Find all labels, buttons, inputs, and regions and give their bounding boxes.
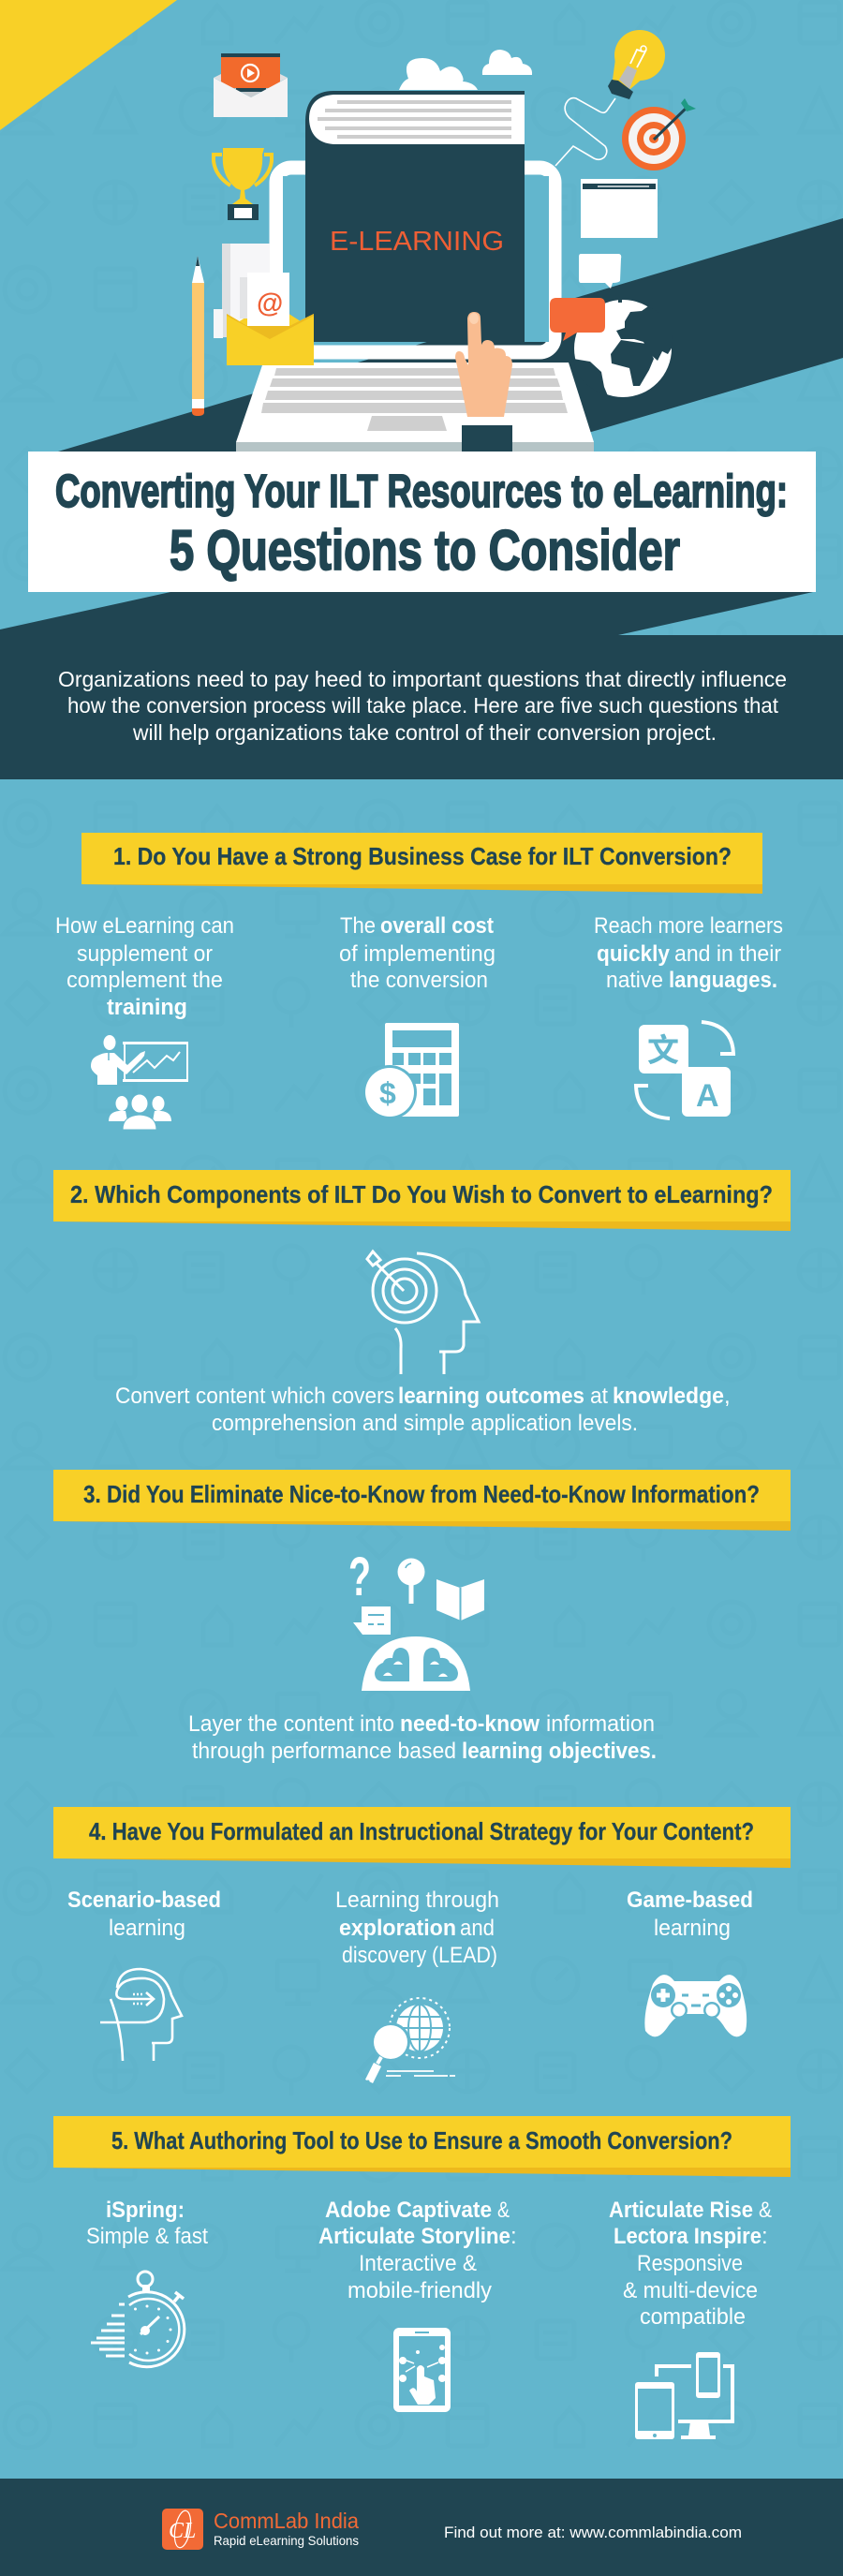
icon: head with target: [367, 1251, 479, 1374]
text: reach learners: native: [606, 968, 663, 993]
text: rise and lectora: &: [759, 2198, 772, 2223]
text: supplement training: [55, 913, 234, 1020]
text: reach learners: [594, 913, 783, 993]
text: exploration: and: [460, 1916, 495, 1941]
tagline: Rapid eLearning Solutions: [214, 2533, 359, 2548]
icon: multi-device: [635, 2352, 732, 2439]
text: scenario based: learning: [109, 1916, 185, 1941]
text: captivate and storyline: Interactive &: [359, 2251, 477, 2276]
heading: question 5: [53, 2116, 791, 2177]
text: learning outcomes: at: [590, 1384, 608, 1409]
text: overall cost: of implementing: [339, 941, 495, 967]
icon: white speech bubble: [579, 254, 621, 289]
text: game based: [627, 1888, 753, 1941]
icon: globe and magnifier: [367, 1998, 455, 2083]
laptop keyboard: [236, 363, 594, 452]
section 4: [53, 1807, 791, 2083]
intro text: how the conversion process will take place. Here are five such questions that: [67, 693, 779, 718]
icon: need to know cluster: [348, 1547, 484, 1691]
logo: CL: [169, 2519, 196, 2543]
book: [305, 91, 525, 342]
icon: head with arrow: [100, 1969, 182, 2061]
intro text: Organizations need to pay heed to important questions that directly influence: [58, 667, 787, 691]
text: captivate and storyline: Adobe Captivate: [325, 2198, 492, 2223]
text: learning outcomes: [115, 1384, 731, 1436]
text: layer the content: need-to-know: [400, 1711, 540, 1737]
text: rise and lectora: :: [762, 2224, 768, 2249]
intro text: [58, 667, 787, 745]
text: layer the content: Layer the content into: [188, 1711, 394, 1737]
icon: email envelope: @: [257, 289, 283, 318]
logo: [162, 2509, 203, 2550]
heading: question 2: 2. Which Components of ILT Do You Wish to Convert to eLearning?: [70, 1180, 773, 1208]
icon: translation: [636, 1022, 733, 1118]
text: iSpring: iSpring:: [106, 2198, 185, 2223]
book title: E-LEARNING: [330, 227, 504, 257]
icon: touch phone: [393, 2328, 451, 2412]
text: game based: learning: [654, 1916, 731, 1941]
icon: trainer at board: [91, 1035, 188, 1130]
text: exploration: Learning through: [335, 1888, 499, 1913]
text: iSpring: [86, 2198, 208, 2249]
text: reach learners: and in their: [674, 941, 781, 967]
text: reach learners: quickly: [597, 941, 671, 967]
icon: calculator and coin: $: [379, 1076, 396, 1110]
text: learning outcomes: learning outcomes: [398, 1384, 584, 1409]
icon: email envelope: [227, 273, 314, 365]
intro text: will help organizations take control of their conversion project.: [132, 720, 717, 745]
heading: question 2: [53, 1170, 791, 1231]
icon: stopwatch: [91, 2272, 185, 2367]
text: reach learners: Reach more learners: [594, 913, 783, 939]
wire: [555, 98, 615, 166]
text: rise and lectora: & multi-device: [623, 2278, 758, 2303]
text: supplement training: complement the: [67, 968, 223, 993]
dark diagonal band: [58, 218, 843, 452]
text: learning outcomes: comprehension and simple application levels.: [212, 1411, 638, 1436]
icon: need to know cluster: ?: [348, 1547, 371, 1607]
text: captivate and storyline: mobile-friendly: [348, 2278, 492, 2303]
icon: globe: [573, 300, 673, 398]
heading: question 5: 5. What Authoring Tool to Use to Ensure a Smooth Conversion?: [111, 2126, 732, 2154]
icon: translation: A: [696, 1078, 719, 1114]
text: reach learners: languages.: [669, 968, 777, 993]
text: rise and lectora: [609, 2198, 772, 2330]
panel: title box: [28, 452, 816, 592]
text: learning outcomes: ,: [724, 1384, 731, 1409]
title line 2: 5 Questions to Consider: [170, 519, 680, 582]
heading: question 1: [81, 833, 762, 894]
text: captivate and storyline: [318, 2198, 517, 2303]
text: layer the content: through performance based: [192, 1739, 456, 1764]
text: game based: Game-based: [627, 1888, 753, 1913]
icon: paper scroll: [214, 244, 270, 338]
icon: video envelope: [214, 53, 288, 117]
text: captivate and storyline: :: [510, 2224, 517, 2249]
text: scenario based: Scenario-based: [67, 1888, 221, 1913]
text: layer the content: information: [546, 1711, 655, 1737]
text: rise and lectora: Articulate Rise: [609, 2198, 753, 2223]
text: rise and lectora: Responsive: [637, 2251, 743, 2276]
monitor frame: [276, 168, 555, 352]
section 5: [53, 2116, 791, 2439]
text: rise and lectora: compatible: [640, 2304, 746, 2330]
icon: trophy: [214, 148, 272, 220]
text: scenario based: [67, 1888, 221, 1941]
section 3: [53, 1470, 791, 1764]
hero illustration: [192, 30, 696, 452]
text: supplement training: How eLearning can: [55, 913, 234, 939]
text: learning outcomes: Convert content which covers: [115, 1384, 394, 1409]
icon: browser window: [581, 179, 658, 238]
icon: light bulb: [608, 30, 665, 99]
icon: clouds: [399, 50, 532, 90]
text: rise and lectora: Lectora Inspire: [614, 2224, 762, 2249]
icon: calculator and coin: [362, 1023, 459, 1119]
text: iSpring: Simple & fast: [86, 2224, 208, 2249]
website: Find out more at: www.commlabindia.com: [444, 2524, 742, 2541]
text: overall cost: the conversion: [350, 968, 488, 993]
text: supplement training: training: [107, 995, 187, 1020]
text: overall cost: overall cost: [380, 913, 494, 939]
text: overall cost: The: [340, 913, 376, 939]
icon: pointing hand: [455, 312, 512, 452]
icon: pencil: [192, 256, 204, 416]
heading: question 4: [53, 1807, 791, 1868]
brand name: CommLab India: [214, 2509, 359, 2533]
section 2: [53, 1170, 791, 1436]
icon: orange speech bubble: [550, 298, 605, 341]
icon: translation: 文: [647, 1033, 679, 1069]
text: learning outcomes: knowledge: [613, 1384, 724, 1409]
text: supplement training: supplement or: [77, 941, 213, 967]
text: exploration: discovery (LEAD): [342, 1943, 497, 1968]
heading: question 3: [53, 1470, 791, 1531]
text: layer the content: [188, 1711, 657, 1764]
heading: question 1: 1. Do You Have a Strong Business Case for ILT Conversion?: [113, 842, 732, 870]
icon: game controller: [644, 1975, 747, 2036]
dark intro panel background: [0, 592, 843, 779]
text: layer the content: learning objectives.: [462, 1739, 657, 1764]
text: exploration: [335, 1888, 499, 1968]
footer: [0, 2479, 843, 2576]
text: exploration: exploration: [339, 1916, 456, 1941]
icon: target with dart: [622, 98, 696, 170]
text: captivate and storyline: Articulate Storyline: [318, 2224, 510, 2249]
section 1: [55, 833, 783, 1130]
yellow corner triangle: [0, 0, 177, 130]
text: overall cost: [339, 913, 495, 993]
text: captivate and storyline: &: [497, 2198, 510, 2223]
